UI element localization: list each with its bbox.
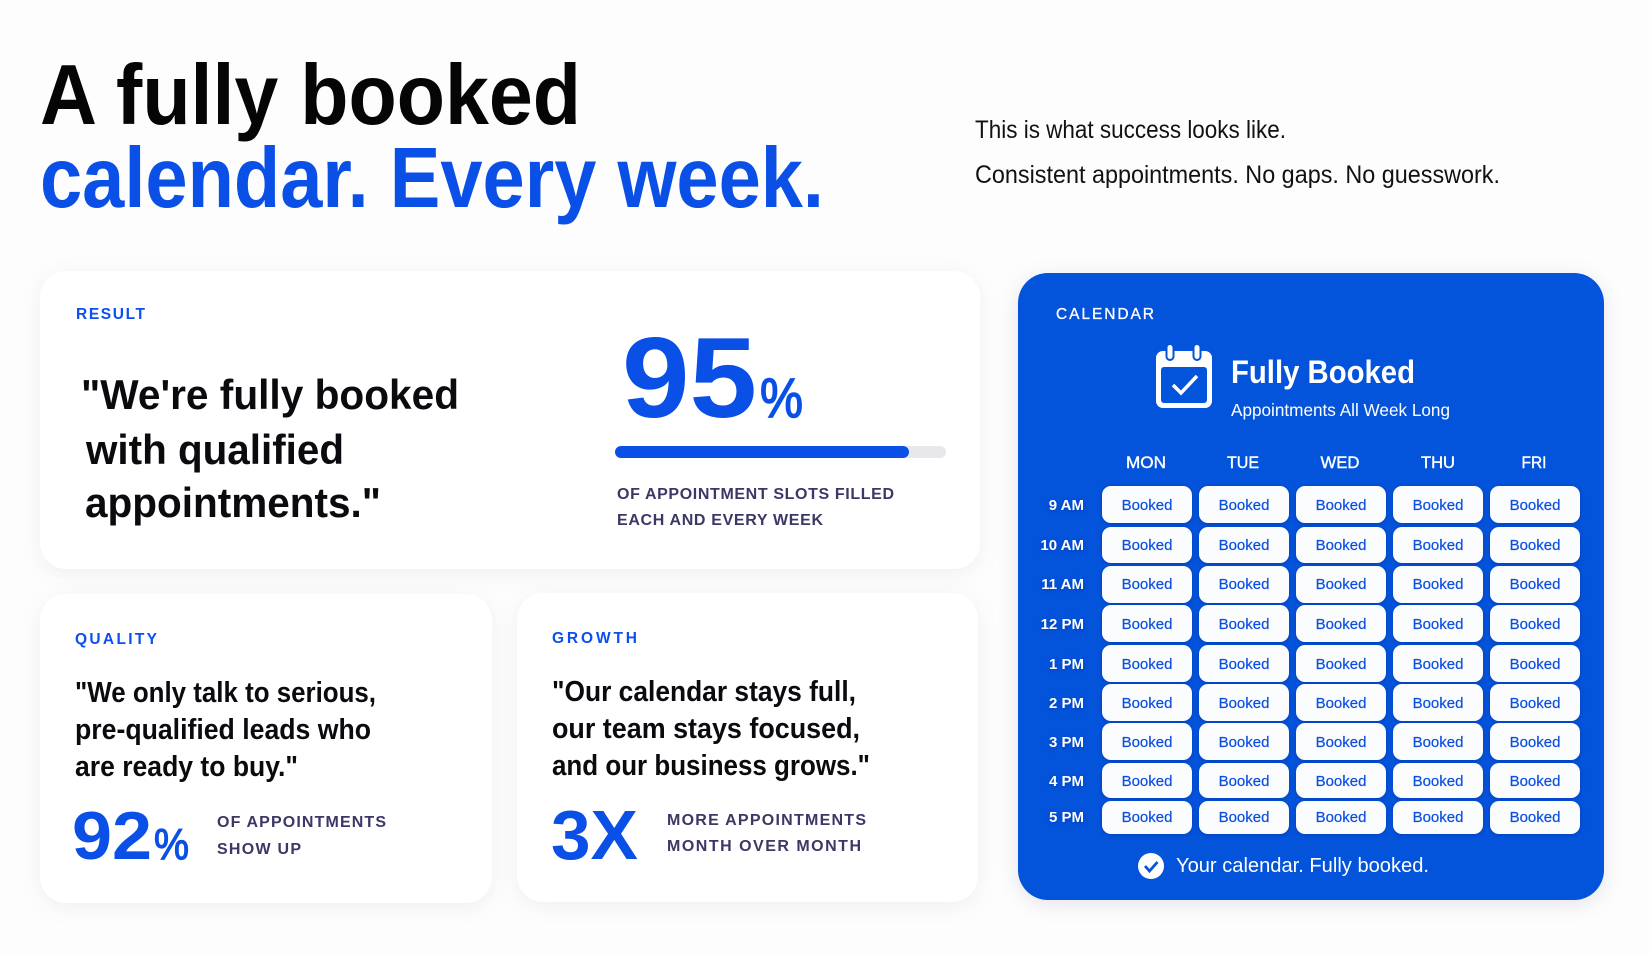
intro text — [975, 116, 1500, 189]
row: 3 PM: Booked — [1413, 734, 1463, 751]
stat caption — [617, 486, 894, 529]
intro text: Consistent appointments. No gaps. No guesswork. — [975, 161, 1500, 189]
growth quote: and our business grows." — [552, 750, 870, 782]
weekday headers — [1126, 453, 1546, 472]
panel: growth — [517, 593, 978, 902]
result label: RESULT — [76, 306, 146, 323]
growth caption: MORE APPOINTMENTS — [667, 812, 866, 829]
row: 3 PM: Booked — [1510, 734, 1560, 751]
row: 5 PM — [1049, 801, 1580, 834]
weekday headers: MON — [1126, 453, 1166, 472]
row: 2 PM: Booked — [1219, 695, 1269, 712]
row: 4 PM: Booked — [1316, 773, 1366, 790]
row: 10 AM — [1040, 527, 1580, 563]
result quote — [81, 371, 459, 526]
row: 11 AM: Booked — [1219, 576, 1269, 593]
row: 1 PM: Booked — [1510, 656, 1560, 673]
stat: 95 percent: 95 — [622, 315, 757, 442]
row: 1 PM: Booked — [1122, 656, 1172, 673]
growth label: GROWTH — [552, 630, 637, 647]
icon: check circle — [1138, 853, 1164, 879]
row: 12 PM: Booked — [1413, 616, 1463, 633]
row: 2 PM: Booked — [1413, 695, 1463, 712]
result quote: "We're fully booked — [81, 371, 459, 418]
row: 2 PM: Booked — [1122, 695, 1172, 712]
row: 1 PM: Booked — [1413, 656, 1463, 673]
title: calendar. Every week. — [40, 131, 824, 226]
row: 11 AM: Booked — [1122, 576, 1172, 593]
quality caption: OF APPOINTMENTS — [217, 814, 386, 831]
weekday headers: FRI — [1522, 453, 1546, 472]
row: 12 PM — [1041, 605, 1580, 642]
stat: 92 percent — [72, 798, 189, 874]
row: 10 AM: Booked — [1316, 537, 1366, 554]
row: 4 PM: Booked — [1219, 773, 1269, 790]
row: 4 PM: Booked — [1413, 773, 1463, 790]
row: 2 PM: 2 PM — [1049, 695, 1084, 712]
weekday headers: THU — [1421, 453, 1455, 472]
icon: calendar with check — [1156, 344, 1212, 408]
row: 1 PM — [1049, 645, 1580, 682]
row: 12 PM: Booked — [1219, 616, 1269, 633]
row: 9 AM — [1049, 486, 1580, 523]
row: 10 AM: Booked — [1219, 537, 1269, 554]
row: 9 AM: Booked — [1510, 497, 1560, 514]
quality caption: SHOW UP — [217, 841, 301, 858]
row: 9 AM: Booked — [1219, 497, 1269, 514]
row: 11 AM: Booked — [1510, 576, 1560, 593]
row: 1 PM: Booked — [1219, 656, 1269, 673]
stat caption: OF APPOINTMENT SLOTS FILLED — [617, 486, 894, 503]
row: 3 PM — [1049, 723, 1580, 760]
schedule grid — [1040, 486, 1580, 834]
row: 9 AM: Booked — [1316, 497, 1366, 514]
quality quote: "We only talk to serious, — [75, 677, 376, 709]
row: 11 AM — [1041, 566, 1580, 603]
row: 2 PM: Booked — [1510, 695, 1560, 712]
row: 3 PM: Booked — [1219, 734, 1269, 751]
row: 1 PM: Booked — [1316, 656, 1366, 673]
calendar footer: Your calendar. Fully booked. — [1176, 855, 1429, 877]
row: 12 PM: 12 PM — [1041, 616, 1084, 633]
row: 4 PM — [1049, 763, 1580, 798]
row: 3 PM: Booked — [1316, 734, 1366, 751]
growth caption: MONTH OVER MONTH — [667, 838, 861, 855]
row: 5 PM: Booked — [1316, 809, 1366, 826]
row: 4 PM: Booked — [1510, 773, 1560, 790]
row: 5 PM: Booked — [1413, 809, 1463, 826]
stat: 92 percent: % — [154, 820, 189, 869]
row: 12 PM: Booked — [1122, 616, 1172, 633]
growth quote — [552, 676, 870, 782]
panel: calendar — [1018, 273, 1604, 900]
result quote: appointments." — [85, 479, 381, 526]
row: 4 PM: Booked — [1122, 773, 1172, 790]
title — [40, 48, 824, 226]
stat: 95 percent: % — [760, 366, 803, 429]
row: 11 AM: Booked — [1316, 576, 1366, 593]
row: 3 PM: 3 PM — [1049, 734, 1084, 751]
row: 9 AM: 9 AM — [1049, 497, 1084, 514]
row: 4 PM: 4 PM — [1049, 773, 1084, 790]
row: 11 AM: 11 AM — [1041, 576, 1084, 593]
growth quote: our team stays focused, — [552, 713, 860, 745]
quality quote: pre-qualified leads who — [75, 714, 371, 746]
panel: result — [40, 271, 980, 569]
title: A fully booked — [40, 48, 581, 143]
row: 9 AM: Booked — [1413, 497, 1463, 514]
stat caption: EACH AND EVERY WEEK — [617, 512, 823, 529]
row: 5 PM: Booked — [1122, 809, 1172, 826]
weekday headers: WED — [1320, 453, 1360, 472]
intro text: This is what success looks like. — [975, 116, 1286, 144]
row: 3 PM: Booked — [1122, 734, 1172, 751]
row: 5 PM: Booked — [1510, 809, 1560, 826]
row: 5 PM: Booked — [1219, 809, 1269, 826]
quality quote: are ready to buy." — [75, 751, 298, 783]
row: 12 PM: Booked — [1510, 616, 1560, 633]
row: 10 AM: Booked — [1413, 537, 1463, 554]
quality quote — [75, 677, 376, 783]
result quote: with qualified — [85, 426, 344, 473]
row: 1 PM: 1 PM — [1049, 656, 1084, 673]
quality caption — [217, 814, 386, 858]
calendar label: CALENDAR — [1056, 306, 1154, 323]
growth caption — [667, 812, 866, 855]
growth quote: "Our calendar stays full, — [552, 676, 856, 708]
row: 2 PM — [1049, 684, 1580, 721]
row: 12 PM: Booked — [1316, 616, 1366, 633]
row: 5 PM: 5 PM — [1049, 809, 1084, 826]
row: 11 AM: Booked — [1413, 576, 1463, 593]
panel: quality — [40, 594, 492, 903]
weekday headers: TUE — [1227, 453, 1259, 472]
stat: 3X: 3X — [551, 796, 638, 874]
calendar subheading: Appointments All Week Long — [1231, 400, 1450, 420]
stat: 92 percent: 92 — [72, 798, 152, 874]
quality label: QUALITY — [75, 631, 158, 648]
row: 10 AM: Booked — [1122, 537, 1172, 554]
row: 9 AM: Booked — [1122, 497, 1172, 514]
row: 10 AM: Booked — [1510, 537, 1560, 554]
row: 2 PM: Booked — [1316, 695, 1366, 712]
row: 10 AM: 10 AM — [1040, 537, 1084, 554]
calendar heading: Fully Booked — [1231, 354, 1415, 390]
progress bar — [615, 446, 946, 458]
